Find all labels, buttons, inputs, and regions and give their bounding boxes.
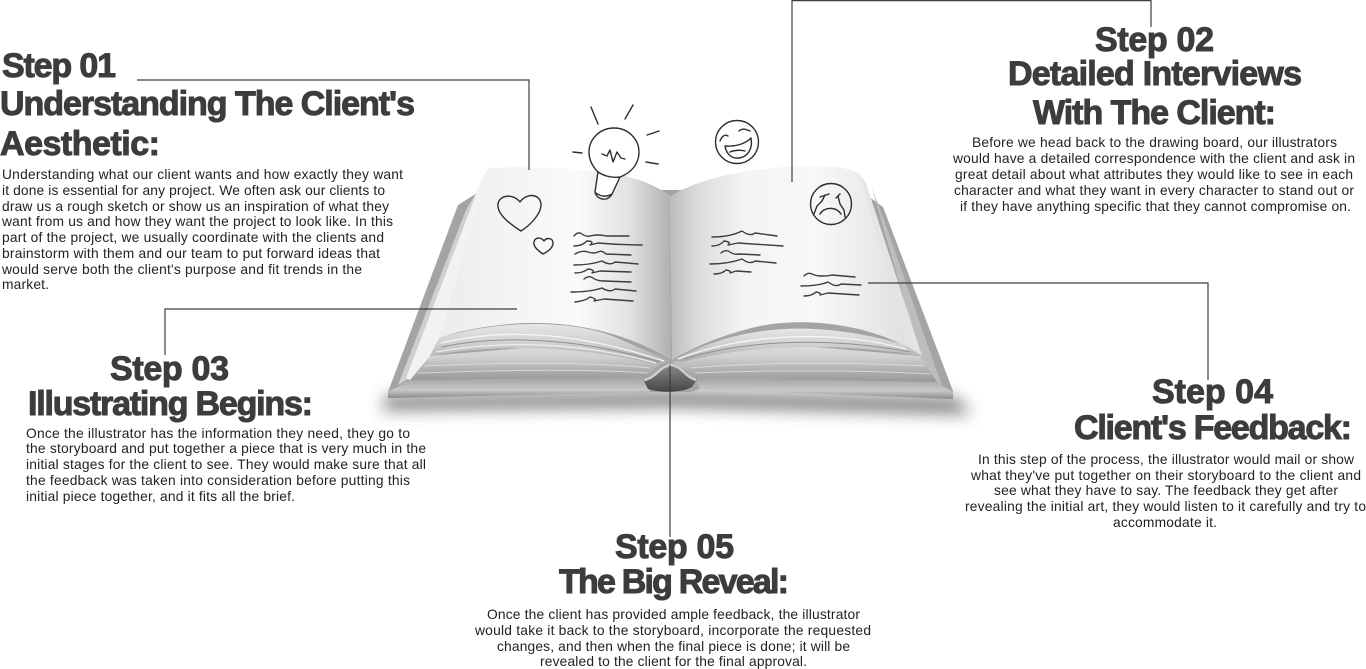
left white bevel <box>406 170 488 380</box>
cover bottom lip right <box>694 378 953 399</box>
scribble text: right page lower <box>801 273 861 296</box>
text: step 02 body: Before we head back to the drawing board, our illustrators <box>972 135 1337 150</box>
icon: crying face <box>810 184 852 224</box>
text: step 01 body: it done is essential for any project. We often ask our clients to <box>2 183 385 198</box>
right page stack <box>672 329 922 362</box>
text: step 01 body <box>1 167 403 292</box>
heading: step 05: Step 05 <box>615 528 734 566</box>
heading: step 05: The Big Reveal: <box>559 563 789 601</box>
text: step 02 body <box>952 135 1355 214</box>
connector: step 03 <box>165 309 517 355</box>
text: step 04 body <box>965 452 1366 530</box>
text: step 04 body: see what they have to say. The feedback they get after <box>994 483 1338 498</box>
heading: step 04: Step 04 <box>1152 373 1273 411</box>
text: step 05 body: changes, and then when the final piece is done; it will be <box>497 639 850 654</box>
right page <box>670 166 907 360</box>
heading: step 04: Client's Feedback: <box>1074 409 1352 447</box>
text: step 03 body: Once the illustrator has the information they need, they go to <box>26 426 410 441</box>
text: step 04 body: In this step of the process, the illustrator would mail or show <box>978 452 1354 467</box>
heading: step 03 <box>28 350 313 423</box>
text: step 05 body: revealed to the client for the final approval. <box>540 654 807 669</box>
right bevel <box>858 172 922 356</box>
icon: large heart <box>498 196 541 231</box>
text: step 04 body: what they've put together on their storyboard to the client and <box>970 468 1361 483</box>
heading: step 03: Step 03 <box>110 350 229 388</box>
text: step 05 body: Once the client has provided ample feedback, the illustrator <box>487 607 860 622</box>
heading: step 02 <box>1008 21 1302 132</box>
connector: step 02 <box>792 1 1151 182</box>
icon: laughing face <box>716 120 758 164</box>
panel: step 02 <box>952 21 1355 214</box>
scribble text: left page <box>571 233 642 302</box>
right stack lines <box>678 337 910 359</box>
text: step 02 body: great detail about what attributes they would like to see in each <box>955 167 1353 182</box>
text: step 01 body: draw us a rough sketch or show us an inspiration of what they <box>2 199 389 214</box>
panel: step 05 <box>474 528 871 669</box>
text: step 03 body: the feedback was taken into consideration before putting this <box>26 473 410 488</box>
heading: step 02: Step 02 <box>1095 21 1214 59</box>
heading: step 02: With The Client: <box>1033 94 1276 132</box>
left stack lines <box>436 334 664 363</box>
left page block lines <box>418 363 650 373</box>
connector: step 04 <box>868 283 1208 380</box>
panel: step 03 <box>26 350 426 504</box>
text: step 02 body: would have a detailed correspondence with the client and ask in <box>952 151 1355 166</box>
connector: step 01 <box>137 80 529 170</box>
text: step 05 body <box>474 607 871 669</box>
connector: step 05 <box>669 365 671 537</box>
heading: step 05 <box>559 528 789 601</box>
left page block face <box>410 345 668 380</box>
back cover <box>388 190 953 399</box>
cover inner light strip right <box>872 188 942 386</box>
text: step 03 body: initial piece together, and it fits all the brief. <box>26 489 295 504</box>
text: step 01 body: would serve both the client's purpose and fit trends in the <box>1 262 362 277</box>
cover inner light strip left <box>398 180 484 385</box>
heading: step 03: Illustrating Begins: <box>28 385 313 423</box>
heading: step 04 <box>1074 373 1352 447</box>
heading: step 01: Step 01 <box>2 47 116 85</box>
icon: light bulb <box>573 105 659 199</box>
left page stack <box>430 324 670 364</box>
text: step 01 body: Understanding what our client wants and how exactly they want <box>2 167 403 182</box>
text: step 05 body: would take it back to the storyboard, incorporate the requested <box>474 623 871 638</box>
text: step 02 body: if they have anything specific that they cannot compromise on. <box>960 199 1351 214</box>
text: step 03 body: initial stages for the client to see. They would make sure that all <box>26 457 426 472</box>
icon: small heart <box>534 238 553 254</box>
left page <box>440 167 671 360</box>
scribble text: right page upper <box>710 231 783 274</box>
spine hump <box>643 364 697 392</box>
text: step 01 body: market. <box>2 277 49 292</box>
text: step 04 body: accommodate it. <box>1113 515 1217 530</box>
heading: step 02: Detailed Interviews <box>1008 55 1302 93</box>
text: step 01 body: want from us and how they want the project to look like. In this <box>1 214 393 229</box>
right page block face <box>672 344 937 382</box>
text: step 03 body: the storyboard and put together a piece that is very much in the <box>26 441 426 456</box>
panel: step 04 <box>965 373 1366 530</box>
right page block lines <box>690 363 930 374</box>
book drop shadow <box>382 392 972 414</box>
text: step 01 body: part of the project, we usually coordinate with the clients and <box>2 230 384 245</box>
heading: step 01: Understanding The Client's <box>0 85 415 123</box>
heading: step 01 <box>0 47 415 163</box>
text: step 02 body: character and what they want in every character to stand out or <box>954 183 1354 198</box>
text: step 01 body: brainstorm with them and our team to put forward ideas that <box>2 246 380 261</box>
open book illustration <box>382 166 972 414</box>
text: step 03 body <box>26 426 426 504</box>
text: step 04 body: revealing the initial art, they would listen to it carefully and try to <box>965 499 1366 514</box>
cover bottom lip left <box>388 378 650 398</box>
heading: step 01: Aesthetic: <box>0 125 160 163</box>
panel: step 01 <box>0 47 415 292</box>
